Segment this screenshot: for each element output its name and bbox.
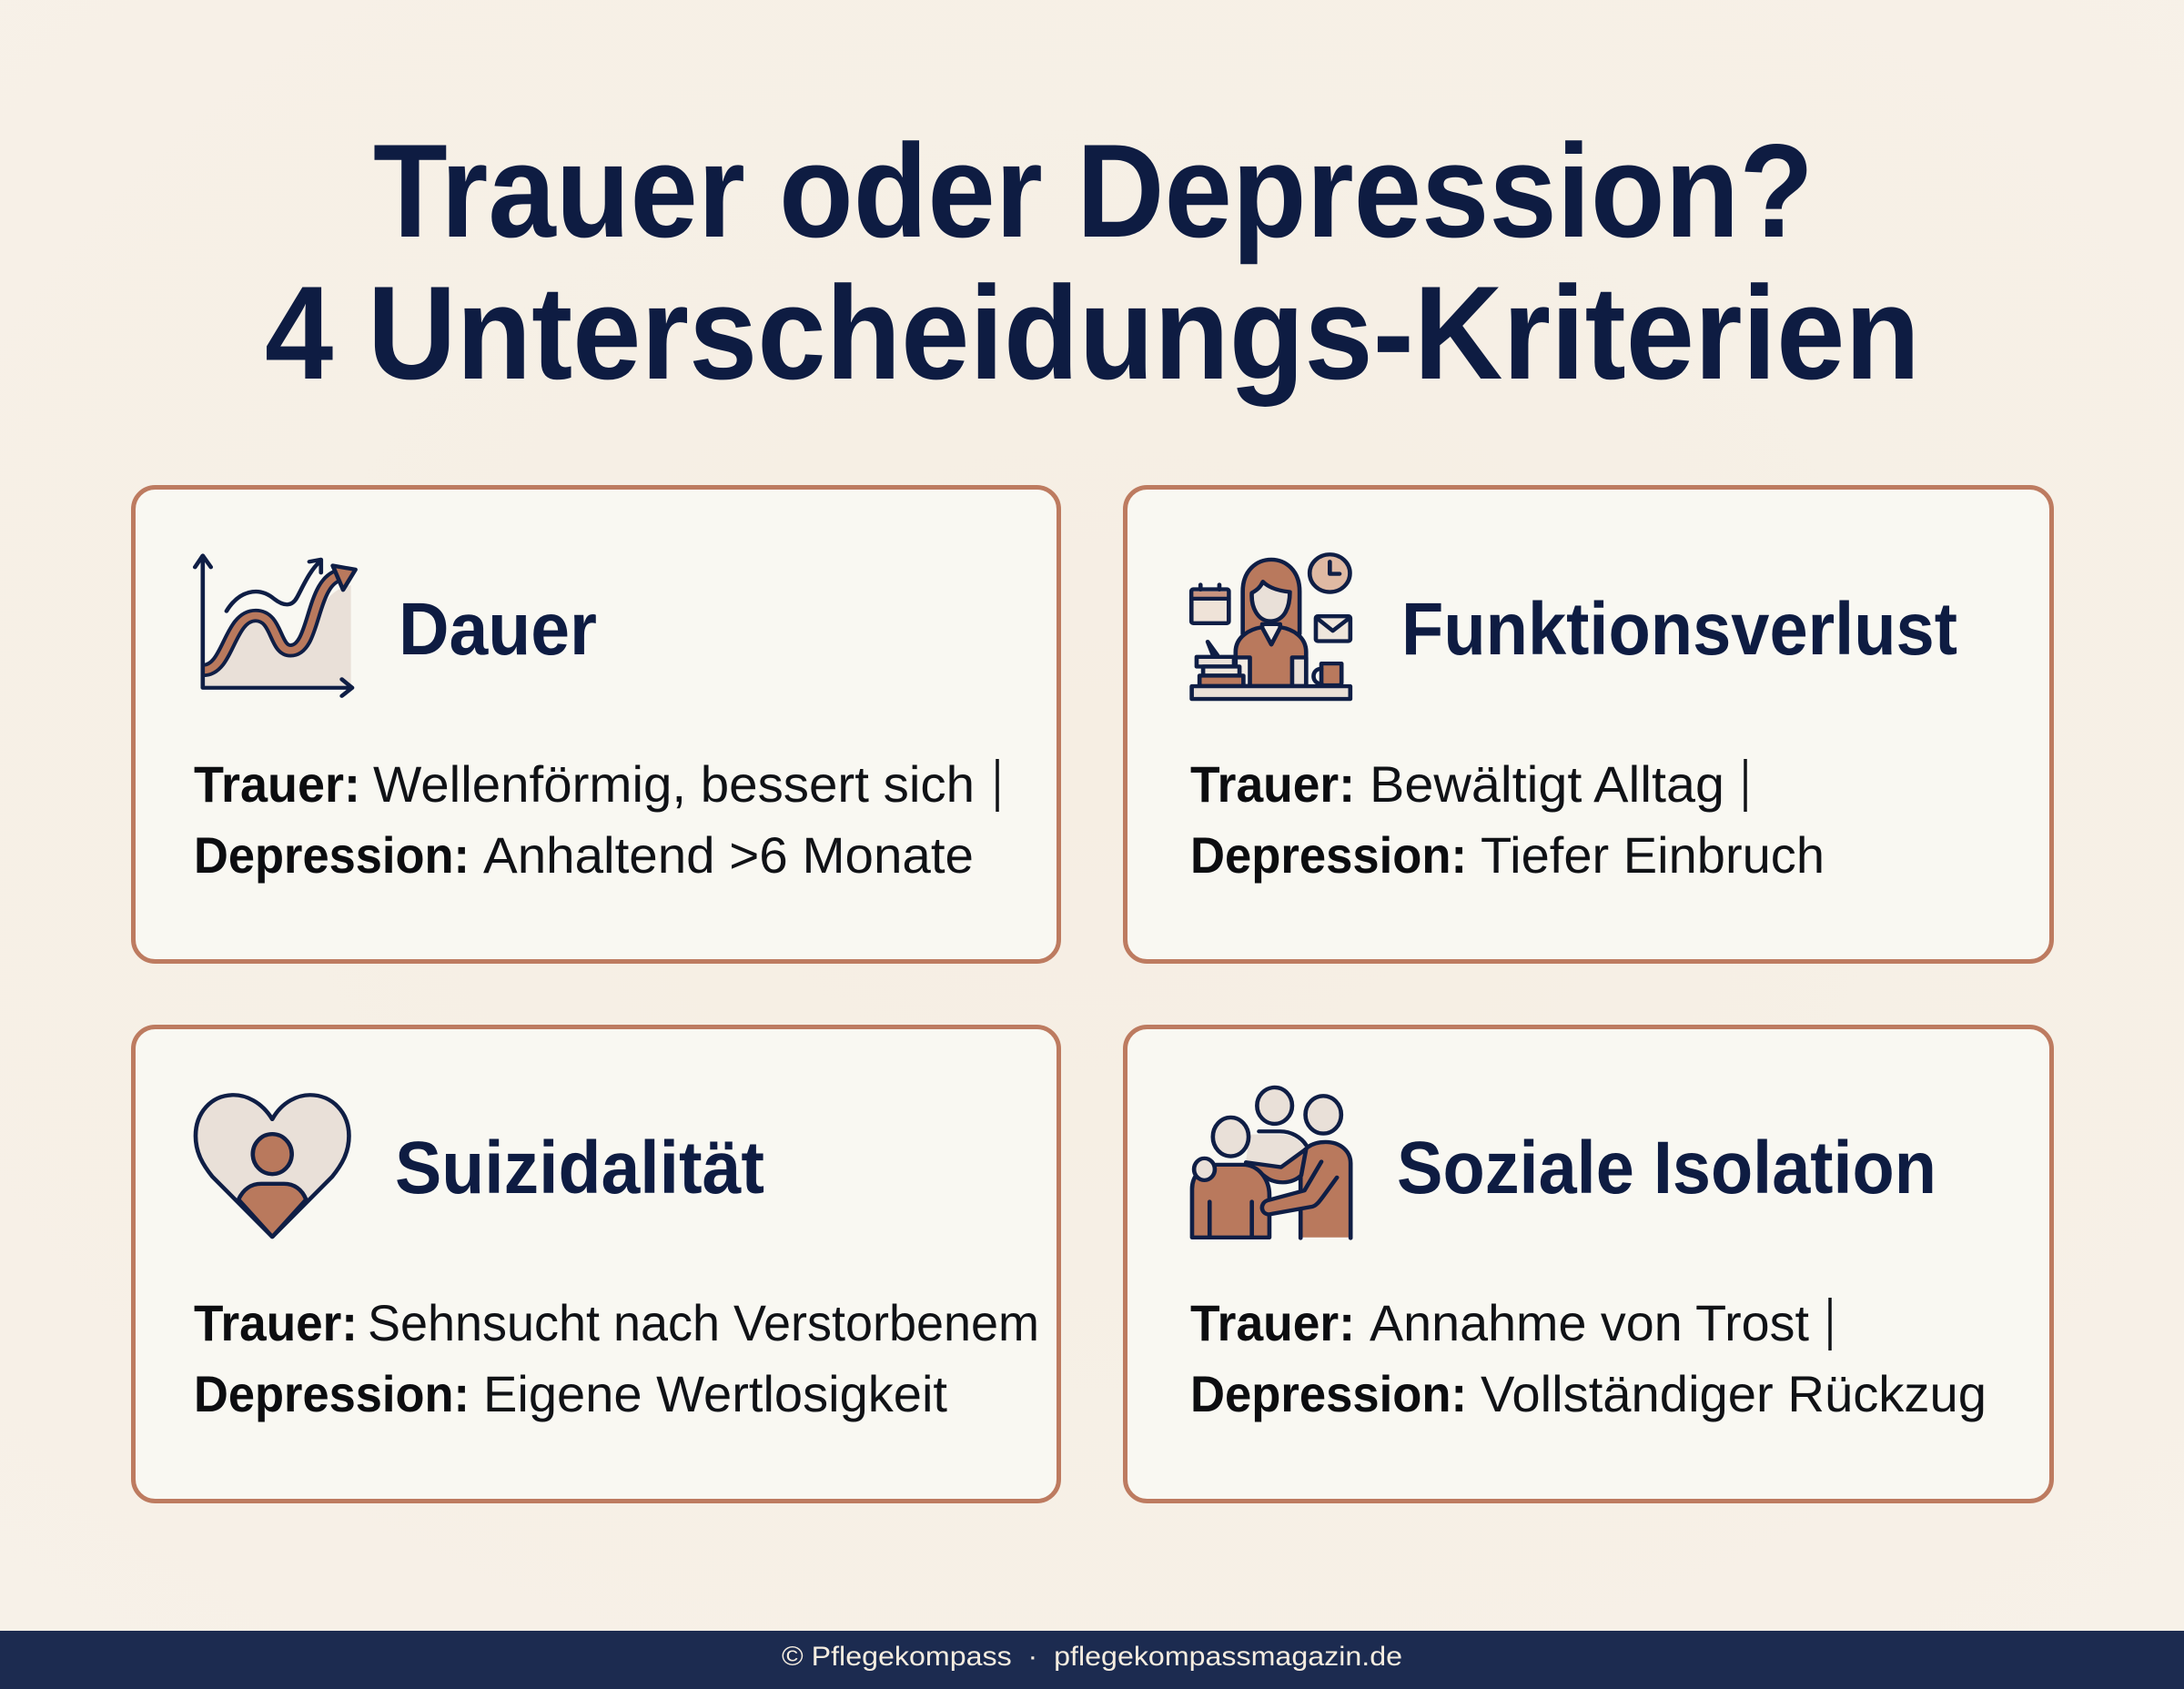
title: 4 Unterscheidungs-Kriterien [265, 258, 1920, 407]
text block: Suizidalität comparison: Trauer: [194, 1294, 358, 1351]
panel: Suizidalität [133, 1027, 1059, 1502]
panel: Funktionsverlust [1125, 488, 2051, 961]
icon: heart with person [196, 1095, 349, 1237]
text block: Funktionsverlust comparison: Tiefer Einbruch [1481, 826, 1825, 884]
text block: Funktionsverlust comparison: Depression: [1190, 826, 1467, 884]
text block: Dauer comparison: Wellenförmig, bessert sich [373, 755, 975, 813]
heading: Funktionsverlust: Funktionsverlust [1401, 588, 1957, 671]
text block: Suizidalität comparison: Depression: [194, 1365, 470, 1422]
footer bar [0, 1631, 2184, 1689]
text block: Funktionsverlust comparison: Trauer: [1190, 755, 1355, 813]
text block: Suizidalität comparison: Sehnsucht nach Verstorbenem [368, 1294, 1039, 1351]
text block: Dauer comparison: Trauer: [194, 755, 360, 813]
text block: Soziale Isolation comparison: Annahme von Trost [1370, 1294, 1809, 1351]
text block: Soziale Isolation comparison [1190, 1294, 1987, 1422]
text block: Dauer comparison [194, 755, 997, 884]
text block: Dauer comparison: Depression: [194, 826, 470, 884]
text block: Soziale Isolation comparison: Vollständiger Rückzug [1481, 1365, 1987, 1422]
text block: Soziale Isolation comparison: Depression: [1190, 1365, 1467, 1422]
icon: group of supporting people [1192, 1087, 1350, 1238]
text block: Soziale Isolation comparison: Trauer: [1190, 1294, 1355, 1351]
panel: Soziale Isolation [1125, 1027, 2051, 1502]
footer bar: © Pflegekompass · pflegekompassmagazin.de [782, 1642, 1402, 1672]
text block: Funktionsverlust comparison: Bewältigt Alltag [1370, 755, 1724, 813]
title: Trauer oder Depression? [373, 116, 1814, 265]
icon: wave chart with arrows [195, 556, 356, 696]
text block: Suizidalität comparison [194, 1294, 1039, 1422]
text block: Dauer comparison: Anhaltend >6 Monate [483, 826, 974, 884]
heading: Soziale Isolation: Soziale Isolation [1397, 1127, 1936, 1209]
title [265, 116, 1920, 407]
text block: Funktionsverlust comparison [1190, 755, 1825, 884]
heading: Dauer: Dauer [399, 588, 597, 671]
text block: Suizidalität comparison: Eigene Wertlosigkeit [483, 1365, 947, 1422]
heading: Suizidalität: Suizidalität [395, 1127, 764, 1209]
icon: woman at desk [1191, 554, 1350, 699]
panel: Dauer [133, 488, 1059, 961]
